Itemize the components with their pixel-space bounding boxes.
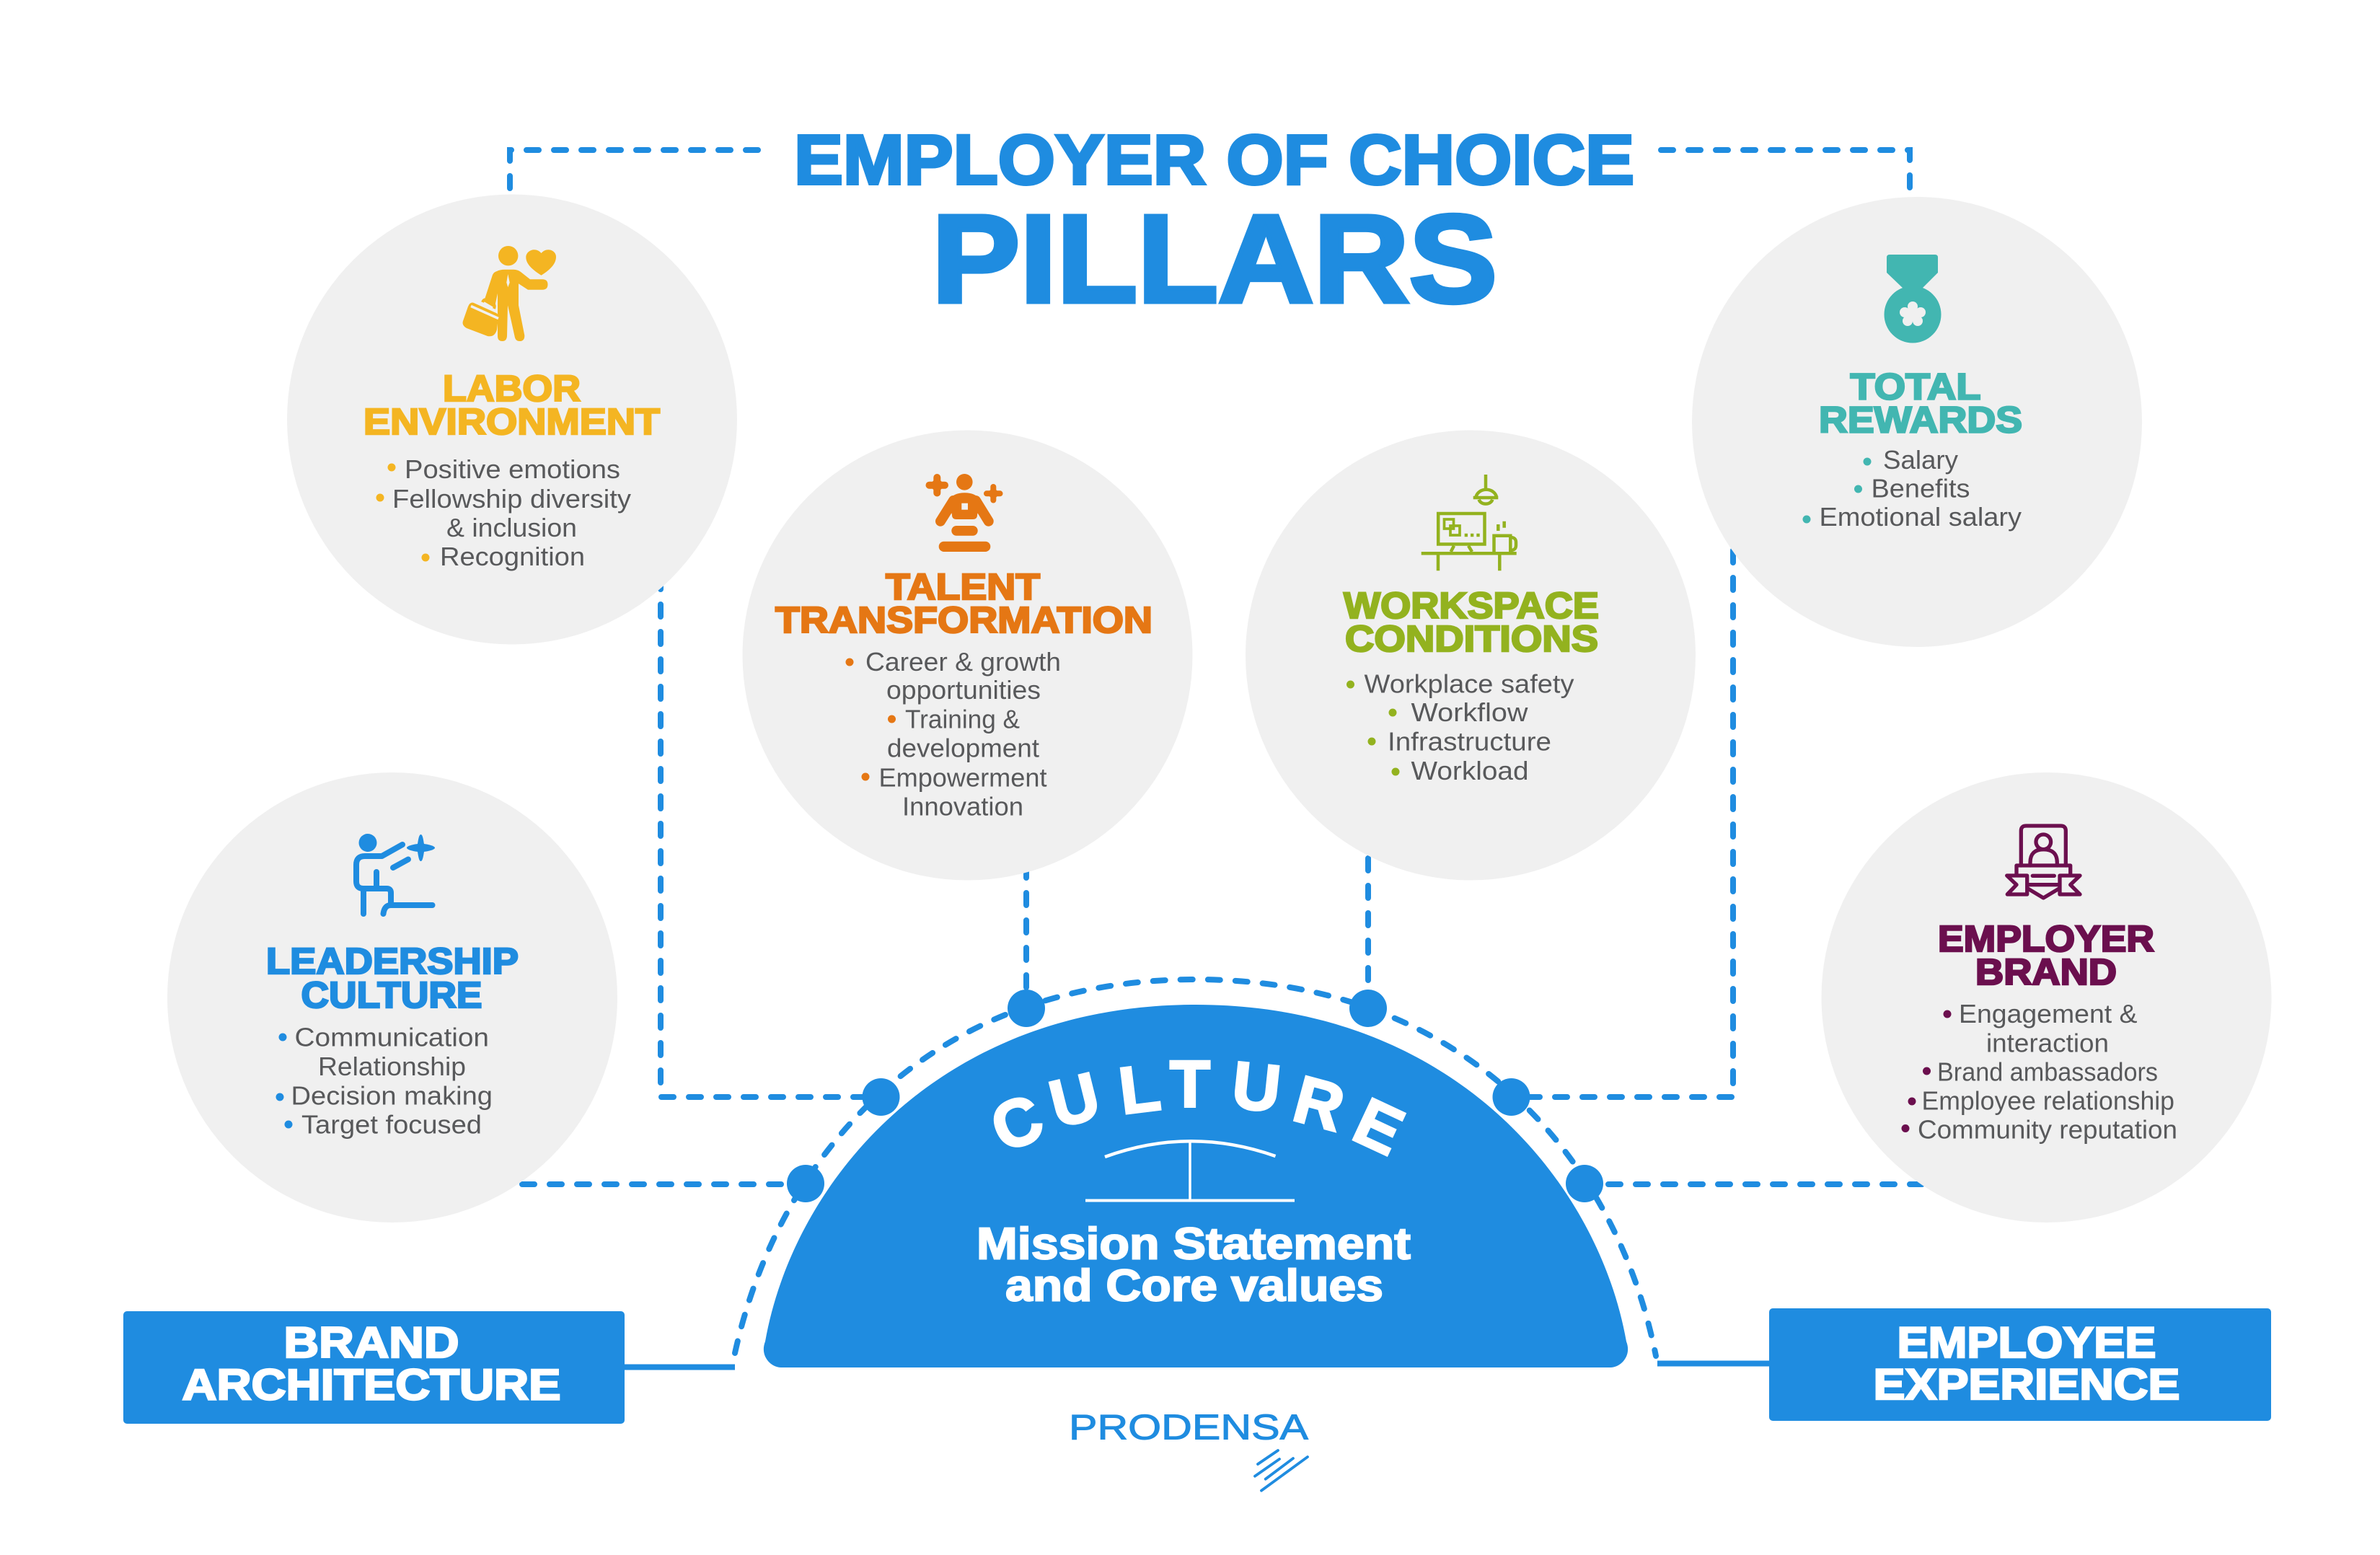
icon: portrait with ribbon (2007, 826, 2080, 898)
heading: CONDITIONS (1345, 618, 1598, 659)
dome: culture (764, 1005, 1628, 1367)
bullet list (276, 1023, 493, 1140)
bullet list: Community reputation (1918, 1115, 2177, 1144)
heading (363, 368, 660, 442)
heading: LEADERSHIP (266, 941, 519, 982)
curved heading: culture: CULTURE (981, 1048, 1414, 1170)
bullet list: Positive emotions (405, 454, 620, 484)
bullet list: Empowerment (878, 763, 1047, 792)
heading: CULTURE (301, 974, 482, 1016)
bullet list: Brand ambassadors (1937, 1057, 2158, 1086)
subtitle: Mission Statement (977, 1219, 1411, 1269)
bullet list: opportunities (886, 675, 1041, 705)
heading: BRAND (1975, 951, 2117, 992)
box: employee experience: EMPLOYEE (1897, 1318, 2156, 1367)
icon: medal (1884, 255, 1942, 343)
heading (1819, 366, 2022, 440)
bullet list: & inclusion (446, 513, 577, 542)
box: brand architecture: ARCHITECTURE (182, 1360, 561, 1409)
bullet list: Benefits (1871, 473, 1970, 503)
bullet list: Fellowship diversity (392, 484, 631, 514)
icon: person reaching for star (356, 834, 435, 914)
heading (775, 566, 1152, 640)
bullet list: Emotional salary (1819, 502, 2022, 532)
heading: EMPLOYER (1938, 918, 2154, 959)
panel: employer brand (1822, 772, 2272, 1223)
subtitle: and Core values (1005, 1261, 1383, 1311)
bullet list: Workplace safety (1365, 669, 1574, 698)
bullet list: interaction (1986, 1028, 2109, 1057)
heading: ENVIRONMENT (363, 401, 660, 442)
panel: talent transformation (743, 430, 1193, 880)
box: brand architecture: BRAND (284, 1318, 459, 1367)
bullet list: Recognition (440, 542, 585, 571)
heading (1938, 918, 2154, 992)
connector dots (787, 990, 1603, 1202)
bullet list: Salary (1883, 445, 1958, 475)
bullet list: development (887, 733, 1039, 763)
bullet list: Relationship (318, 1052, 466, 1081)
bullet list (1803, 445, 2022, 532)
bullet list: Workload (1411, 756, 1529, 785)
bullet list: Infrastructure (1388, 727, 1551, 756)
bullet list: Target focused (301, 1109, 482, 1140)
subtitle (977, 1219, 1411, 1311)
bullet list: Training & (905, 704, 1020, 734)
icon: person with briefcase and heart (463, 246, 556, 341)
panel: leadership culture (167, 772, 617, 1223)
icon: desk with monitor, lamp and mug (1422, 475, 1517, 571)
panel: labor environment (287, 195, 737, 645)
logo: prodensa (1069, 1408, 1308, 1491)
heading: TALENT (886, 566, 1040, 607)
bullet list (376, 454, 631, 571)
heading: LABOR (443, 368, 581, 409)
bullet list: Engagement & (1959, 999, 2138, 1028)
panel: total rewards (1692, 197, 2142, 647)
icon: person with sparkles (929, 474, 1000, 552)
heading: REWARDS (1819, 400, 2022, 440)
bullet list: Workflow (1411, 697, 1529, 727)
bullet list: Innovation (902, 792, 1023, 821)
bullet list (845, 647, 1061, 821)
dashed connectors (510, 150, 1922, 1356)
box: employee experience (1657, 1308, 2271, 1421)
title: PILLARS (932, 189, 1497, 329)
box: brand architecture (123, 1311, 735, 1424)
title: EMPLOYER OF CHOICE (794, 120, 1634, 199)
icon: pillar arc symbol (1085, 1141, 1295, 1200)
bullet list: Employee relationship (1921, 1086, 2174, 1115)
heading: TRANSFORMATION (775, 599, 1152, 640)
bullet list: Communication (294, 1023, 489, 1052)
heading: TOTAL (1851, 366, 1980, 407)
bullet list: Decision making (291, 1080, 493, 1111)
bullet list: Career & growth (865, 647, 1061, 677)
heading (266, 941, 519, 1016)
bullet list (1901, 999, 2177, 1144)
panel: workspace conditions (1246, 430, 1696, 880)
heading: WORKSPACE (1344, 585, 1599, 626)
title (794, 120, 1634, 329)
logo: prodensa: PRODENSA (1069, 1408, 1308, 1447)
bullet list (1347, 669, 1574, 785)
heading (1344, 585, 1599, 659)
box: employee experience: EXPERIENCE (1874, 1360, 2180, 1409)
